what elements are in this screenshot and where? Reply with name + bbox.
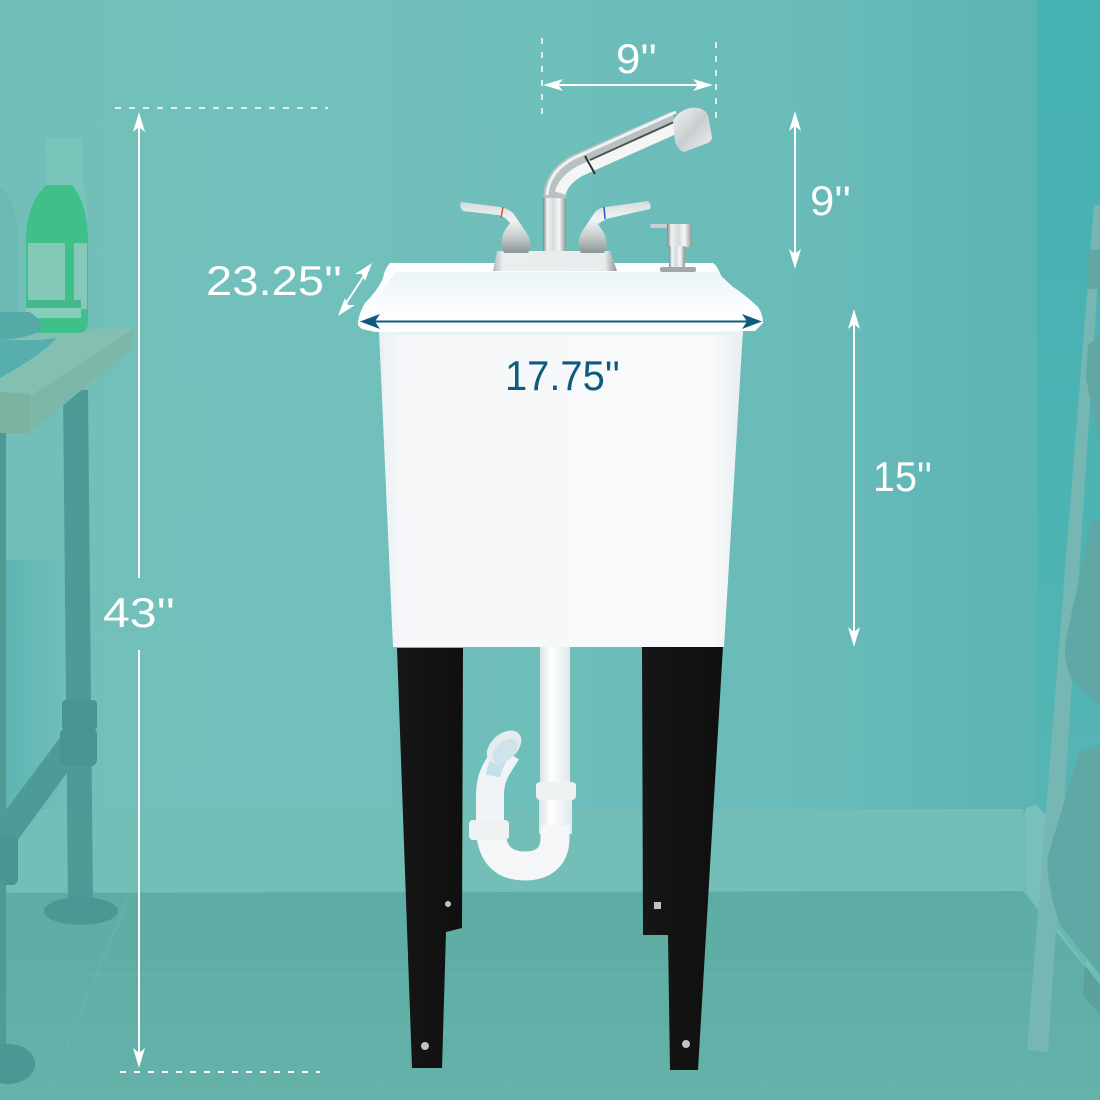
dimension: faucet reach 9 inches — [542, 35, 716, 122]
right handle — [578, 201, 651, 253]
rim — [358, 263, 763, 335]
left leg — [397, 648, 463, 1068]
side table and bottle — [0, 138, 135, 1084]
dimension: basin depth 15 inches — [848, 309, 932, 647]
right leg — [642, 646, 723, 1070]
dimension: faucet height 9 inches — [789, 111, 851, 269]
faucet — [460, 108, 712, 272]
dimension: width 17.75 inches — [360, 314, 762, 399]
dimension: width 17.75 inches: 17.75'' — [505, 352, 620, 399]
table top — [0, 328, 135, 433]
dimension: faucet height 9 inches: 9'' — [810, 177, 851, 224]
sink — [358, 108, 763, 1070]
dimension: length 23.25 inches: 23.25'' — [206, 257, 342, 304]
dimension: basin depth 15 inches: 15'' — [873, 453, 932, 500]
step ladder — [1027, 205, 1100, 1052]
table legs — [0, 390, 118, 1084]
P-trap drain — [469, 646, 576, 866]
dimension: overall height 43 inches — [103, 108, 328, 1072]
spout — [543, 112, 678, 251]
dimension: faucet reach 9 inches: 9'' — [616, 35, 657, 82]
dimension: overall height 43 inches: 43'' — [103, 589, 175, 636]
spray head — [673, 108, 712, 152]
glass jar and towels — [0, 186, 57, 378]
left handle — [460, 202, 531, 253]
basin body — [379, 330, 743, 647]
soap dispenser — [650, 224, 696, 272]
dimension: length 23.25 inches — [206, 257, 372, 316]
deck plate — [493, 251, 617, 271]
green bottle — [26, 138, 88, 333]
